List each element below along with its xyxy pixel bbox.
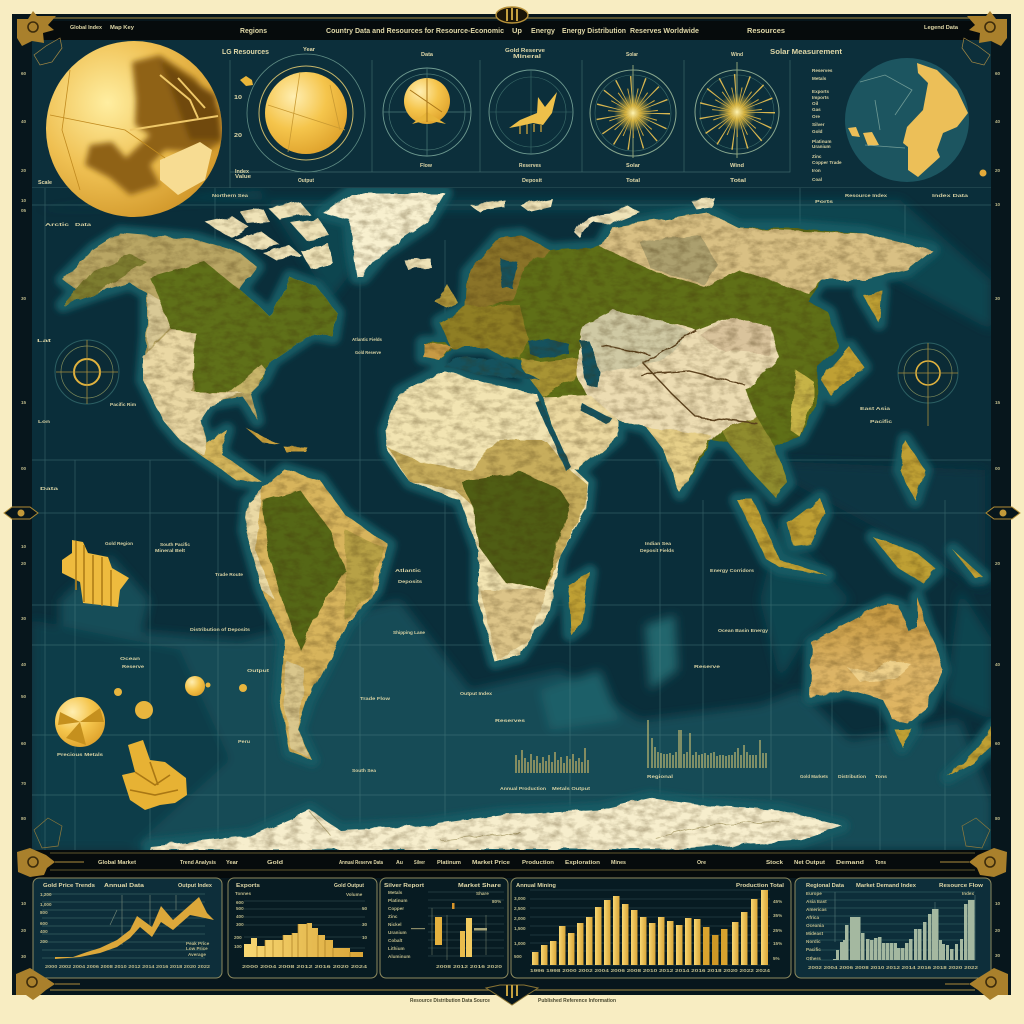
lower strip and labels: Annual Reserve Data [339, 860, 383, 866]
left side scale: 10 [21, 198, 27, 203]
instrument labels: Uranium [812, 144, 831, 149]
map labels: Gold Region [105, 541, 133, 546]
left side scale: 20 [21, 561, 27, 566]
instrument labels: Wind [730, 163, 744, 169]
map labels: Gold Reserve [355, 350, 381, 355]
chart panel 3: sparse bars: Platinum [388, 898, 407, 903]
map labels: Deposit Fields [640, 548, 674, 553]
chart panel 4: gold bars: 25% [773, 928, 782, 933]
left side scale: 30 [21, 296, 27, 301]
left side scale: 10 [21, 544, 27, 549]
chart panel 5: grey-green bars: 2002 2004 2006 2008 2010 2012 2014 2016 2018 2020 2022 [808, 965, 979, 970]
chart panel 5: grey-green bars: Europe [806, 891, 822, 896]
chart panel 3: sparse bars: Metals [388, 890, 403, 895]
left side scale [14, 40, 32, 850]
header strip [32, 21, 991, 40]
chart panel 4: gold bars: 3,000 [514, 896, 526, 901]
map labels: Ocean [120, 656, 140, 661]
lower strip and labels: Trend Analysis [180, 860, 216, 866]
map labels: Mineral Belt [155, 548, 186, 553]
lower strip and labels: Production [522, 860, 554, 866]
chart panel 1: area trend: 800 [40, 910, 48, 915]
ornament: bottom-left corner [16, 968, 80, 1000]
map labels: Data [40, 486, 59, 491]
chart panel 1: area trend: Peak Price [186, 941, 210, 946]
left side scale: 40 [21, 662, 27, 667]
chart panel 3: sparse bars: Cobalt [388, 938, 403, 943]
ornament: left side badge [4, 507, 38, 519]
chart panel 1: area trend: Low Price [186, 946, 208, 951]
instrument labels: Flow [420, 163, 432, 169]
chart panel 1: area trend: 1,200 [40, 892, 52, 897]
chart panel 4: gold bars [511, 878, 791, 978]
chart panel 5: grey-green bars: Market Demand Index [856, 883, 916, 889]
map labels: Regional [647, 774, 673, 779]
instrument labels: Value [235, 174, 251, 180]
right side scale: 80 [995, 816, 1001, 821]
map labels: Arctic [45, 222, 70, 227]
continent: Australia [810, 597, 943, 723]
chart panel 3: sparse bars: Market Share [458, 883, 501, 889]
header strip: Map Key [110, 25, 134, 31]
right side scale: 20 [995, 168, 1001, 173]
chart panel 2: gold hump bars: 10 [362, 935, 368, 940]
ornament: bottom-right corner [945, 968, 1008, 1000]
instrument labels: Ore [812, 114, 820, 119]
chart panel 3: sparse bars: Nickel [388, 922, 402, 927]
map labels: Trade Route [215, 572, 243, 577]
chart panel 3: sparse bars: Lithium [388, 946, 405, 951]
chart panel 2: gold hump bars: 100 [234, 944, 242, 949]
mountain ridges [600, 330, 757, 423]
chart panel 3: sparse bars: Aluminum [388, 954, 410, 959]
ornament: mid-right corner [940, 818, 1007, 877]
instrument labels: Imports [812, 95, 829, 100]
continent coastal halo [63, 193, 998, 850]
left side scale: 05 [21, 208, 27, 213]
map labels: Lon [38, 419, 50, 424]
header strip: Legend Data [924, 25, 958, 31]
map gold resources: nugget [122, 740, 187, 810]
chart panel 4: gold bars: 1,500 [514, 926, 526, 931]
header strip: Reserves Worldwide [630, 26, 699, 35]
lower strip and labels: Demand [836, 860, 864, 866]
map labels: East Asia [860, 406, 891, 411]
right side scale: 60 [995, 71, 1001, 76]
lower strip and labels: Market Price [472, 860, 510, 866]
targeting dial: right [898, 343, 958, 426]
chart panel 3: sparse bars: Uranium [388, 930, 407, 935]
chart panel 5: grey-green bars: Oceania [806, 923, 824, 928]
chart panel 1: area trend: 2000 2002 2004 2006 2008 2010 2012 2014 2016 2018 2020 2022 [45, 964, 211, 969]
chart panel 2: gold hump bars: 30 [362, 922, 368, 927]
right side scale: 30 [995, 296, 1001, 301]
ornament: top-right corner [962, 11, 1007, 65]
map labels [37, 193, 969, 791]
dial 5: sunburst [590, 65, 676, 158]
targeting dial: left [55, 340, 119, 404]
chart panel 5: grey-green bars: Pacific [806, 947, 821, 952]
header strip: Global Index [70, 25, 102, 31]
left lower scale [21, 901, 27, 959]
continent: Africa [386, 370, 589, 662]
instrument labels: Gold Reserve [505, 48, 545, 54]
chart panel 3: sparse bars: Share [476, 891, 489, 896]
footer caption: Resource Distribution Data Source [410, 998, 490, 1004]
map labels: Pacific [870, 419, 893, 424]
chart panel 5: grey-green bars: Americas [806, 907, 827, 912]
map grid lines [32, 188, 991, 850]
chart panel 5: grey-green bars [795, 878, 991, 978]
globe dial 2 [247, 54, 365, 172]
ornament: mid-left corner [17, 818, 84, 877]
instrument labels: Gas [812, 107, 821, 112]
chart panel 1: area trend: 400 [40, 929, 48, 934]
chart panel 1: area trend [33, 878, 222, 978]
chart panel 4: gold bars: 1,000 [514, 941, 526, 946]
chart panel 3: sparse bars: 80% [492, 899, 501, 904]
instrument labels: Mineral [513, 54, 542, 60]
left side scale: 15 [21, 400, 27, 405]
instrument labels: Iron [812, 168, 821, 173]
left lower scale: 10 [21, 901, 27, 906]
chart panel 4: gold bars: Production Total [736, 883, 785, 889]
header strip: Energy [531, 26, 556, 35]
lower strip and labels: Ore [697, 860, 706, 866]
chart panel 1: area trend: Gold Price Trends [43, 883, 95, 889]
dial 6: sunburst [695, 62, 779, 158]
header strip: Energy Distribution [562, 26, 626, 35]
right side scale: 40 [995, 662, 1001, 667]
lower strip and labels: Global Market [98, 860, 136, 866]
continent: Antarctica [150, 798, 842, 850]
inland seas [443, 258, 614, 470]
chart panel 2: gold hump bars: 200 [234, 935, 242, 940]
left lower scale: 20 [21, 928, 27, 933]
chart panel 4: gold bars: 2,000 [514, 916, 526, 921]
instrument labels: Coal [812, 177, 822, 182]
lower strip and labels: Net Output [794, 860, 825, 866]
chart panel 3: sparse bars: Zinc [388, 914, 398, 919]
lower strip and labels: Stock [766, 860, 783, 866]
instrument labels: Year [303, 47, 315, 53]
right side scale [991, 40, 1009, 958]
map labels: Ports [815, 199, 834, 204]
chart panel 4: gold bars: 5% [773, 956, 780, 961]
Arctic islands [205, 198, 715, 270]
chart panel 2: gold hump bars [228, 878, 377, 978]
large golden globe [46, 41, 222, 217]
chart panel 2: gold hump bars: 400 [236, 914, 244, 919]
chart panel 4: gold bars: 15% [773, 941, 782, 946]
lower strip and labels: Platinum [437, 860, 462, 866]
instrument labels: Total [730, 178, 747, 184]
map labels: Reserves [495, 718, 526, 723]
chart panel 1: area trend: 200 [40, 939, 48, 944]
chart panel 2: gold hump bars: 2000 2004 2008 2012 2016 2020 2024 [242, 964, 368, 969]
map: continents [63, 193, 998, 850]
right side scale: 20 [995, 561, 1001, 566]
instrument labels: LG Resources [222, 47, 269, 56]
chart panel 5: grey-green bars: Regional Data [806, 883, 844, 889]
instrument labels: Exports [812, 89, 830, 94]
lower strip and labels: Gold [267, 860, 283, 866]
chart panel 3: sparse bars: 2008 2012 2016 2020 [436, 964, 503, 969]
lower strip and labels [32, 850, 991, 878]
instrument labels: Solar [626, 163, 640, 169]
chart panel 4: gold bars: 35% [773, 913, 782, 918]
instrument labels: Scale [38, 180, 52, 186]
map labels: Precious Metals [57, 752, 104, 757]
arctic crescent [575, 213, 615, 238]
header strip: Resources [747, 26, 785, 35]
continent: Greenland [323, 193, 445, 277]
chart panel 2: gold hump bars: Gold Output [334, 883, 364, 889]
instrument labels: Zinc [812, 154, 822, 159]
map labels: Distribution of Deposits [190, 627, 251, 632]
ornament: top centre badge [496, 7, 528, 23]
instrument labels: Reserves [519, 163, 541, 169]
left side scale: 40 [21, 119, 27, 124]
right side scale: 30 [995, 953, 1001, 958]
chart panel 5: grey-green bars: Others [806, 956, 821, 961]
instrument labels: Data [421, 52, 433, 58]
left side scale: 30 [21, 616, 27, 621]
map bar chart: small [516, 748, 588, 773]
left side scale: 70 [21, 781, 27, 786]
chart panel 2: gold hump bars: 50 [362, 906, 368, 911]
left side scale: 60 [21, 741, 27, 746]
map gold resources: disc [55, 697, 105, 747]
instrument labels: Wind [731, 52, 743, 58]
map gold resources: small coins [114, 676, 247, 719]
chart panel 2: gold hump bars: Tonnes [235, 891, 251, 896]
chart panel 1: area trend: Annual Data [104, 883, 144, 889]
chart panel 2: gold hump bars: 300 [236, 922, 244, 927]
chart panel 3: sparse bars [380, 878, 508, 978]
map labels: Indian Sea [645, 541, 671, 546]
map labels: Tons [875, 774, 887, 779]
map labels: Lat [37, 338, 52, 343]
left side scale: 60 [21, 71, 27, 76]
right side scale: 40 [995, 119, 1001, 124]
chart panel 5: grey-green bars: Africa [806, 915, 819, 920]
UK [436, 284, 458, 308]
footer caption [410, 998, 616, 1004]
instrument labels: Copper Trade [812, 160, 842, 165]
map labels: Energy Corridors [710, 568, 755, 573]
chart panel 5: grey-green bars: Asia East [806, 899, 827, 904]
chart panel 2: gold hump bars: Exports [236, 883, 260, 889]
lower strip and labels: Mines [611, 860, 626, 866]
map labels: Pacific Rim [110, 402, 136, 407]
map labels: Output [247, 668, 270, 673]
map labels: Trade Flow [360, 696, 391, 701]
gold bead [980, 170, 986, 176]
map labels: Data [75, 222, 92, 227]
instrument labels: 10 [234, 95, 242, 101]
right side scale: 00 [995, 466, 1001, 471]
chart panel 5: grey-green bars: Index [962, 891, 974, 896]
right side scale: 15 [995, 400, 1001, 405]
header strip: Regions [240, 26, 267, 35]
chart panel 1: area trend: Output Index [178, 883, 212, 889]
instrument labels: Reserves [812, 68, 833, 73]
chart panel 4: gold bars: Annual Mining [516, 883, 556, 889]
continent: North America [63, 233, 337, 483]
right side scale: 20 [995, 928, 1001, 933]
dial 4: gold chart burst [489, 70, 573, 154]
teal globe with gold land [845, 58, 969, 182]
ornament: right side badge [986, 507, 1020, 519]
chart panel 4: gold bars: 45% [773, 899, 782, 904]
map labels: South Sea [352, 768, 376, 773]
map labels: Ocean Basin Energy [718, 628, 768, 633]
map labels: Reserve [694, 664, 721, 669]
map labels: Metals Output [552, 786, 591, 791]
right side scale: 60 [995, 741, 1001, 746]
map labels: Annual Production [500, 786, 546, 791]
instrument labels: Output [298, 178, 314, 184]
map labels: Output Index [460, 691, 492, 696]
instrument labels: Platinum [812, 139, 831, 144]
right side scale: 10 [995, 901, 1001, 906]
map labels: South Pacific [160, 542, 190, 547]
chart panel 3: sparse bars: Copper [388, 906, 404, 911]
chart panel 2: gold hump bars: 500 [236, 906, 244, 911]
continent: Eurasia [423, 212, 932, 497]
island chains [568, 290, 998, 777]
map labels: Resource Index [845, 193, 888, 198]
instrument labels: Gold [812, 129, 823, 134]
header strip: Country Data and Resources for Resource-Economic [326, 26, 504, 35]
left side scale: 20 [21, 168, 27, 173]
map labels: Northern Sea [212, 193, 249, 198]
chart panel 4: gold bars: 2,500 [514, 906, 526, 911]
footer caption: Published Reference Information [538, 998, 616, 1004]
instrument labels: Metals [812, 76, 827, 81]
main ocean panel [32, 188, 992, 850]
map labels: Atlantic Fields [352, 337, 382, 342]
instrument labels: Deposit [522, 178, 542, 184]
map labels: Index Data [932, 193, 969, 198]
small gold island beside discs [240, 76, 253, 86]
chart panel 1: area trend: Average [188, 952, 206, 957]
map labels: Shipping Lane [393, 630, 425, 635]
instrument labels [38, 47, 843, 186]
Caribbean islands [245, 427, 308, 452]
map labels: Peru [238, 739, 250, 744]
map labels: Reserve [122, 664, 145, 669]
left side scale: 00 [21, 466, 27, 471]
map labels: Distribution [838, 774, 866, 779]
chart panel 1: area trend: 600 [40, 921, 48, 926]
lower strip and labels: Au [396, 860, 403, 866]
top instruments panel [32, 40, 991, 188]
map labels: Gold Markets [800, 774, 828, 779]
right side scale: 10 [995, 202, 1001, 207]
header strip: Up [512, 26, 522, 35]
lower strip and labels: Tons [875, 860, 886, 866]
instrument labels: Solar Measurement [770, 47, 843, 56]
chart panel 1: area trend: 1,000 [40, 902, 52, 907]
chart panel 4: gold bars: 500 [514, 954, 522, 959]
lower strip and labels: Exploration [565, 860, 600, 866]
continent: South America [245, 470, 389, 760]
ornament: top-left corner [17, 11, 62, 65]
instrument labels: Index [235, 169, 249, 175]
chart panel 5: grey-green bars: Mideast [806, 931, 824, 936]
chart panel 5: grey-green bars: Resource Flow [939, 883, 983, 889]
left side scale: 80 [21, 816, 27, 821]
map labels: Atlantic [395, 568, 422, 573]
instrument labels: 20 [234, 133, 242, 139]
instrument labels: Oil [812, 101, 818, 106]
lower strip and labels: Silver [414, 860, 425, 866]
instrument labels: Total [626, 178, 641, 184]
ornament: bottom centre badge [486, 985, 538, 1005]
left side scale: 50 [21, 694, 27, 699]
chart panel 2: gold hump bars: 600 [236, 900, 244, 905]
left lower scale: 30 [21, 954, 27, 959]
map gold resources: left mass [62, 540, 129, 607]
map labels: Deposits [398, 579, 423, 584]
chart panel 4: gold bars: 1996 1998 2000 2002 2004 2006 2008 2010 2012 2014 2016 2018 2020 2022 2024 [530, 968, 771, 973]
globe dial 3 [383, 68, 471, 156]
chart panel 3: sparse bars: Silver Report [384, 883, 424, 889]
instrument labels: Silver [812, 122, 825, 127]
lower strip and labels: Year [226, 860, 238, 866]
chart panel 5: grey-green bars: Nordic [806, 939, 821, 944]
instrument labels: Solar [626, 52, 638, 58]
chart panel 2: gold hump bars: Volume [346, 892, 363, 897]
map bar chart: large [648, 720, 766, 768]
